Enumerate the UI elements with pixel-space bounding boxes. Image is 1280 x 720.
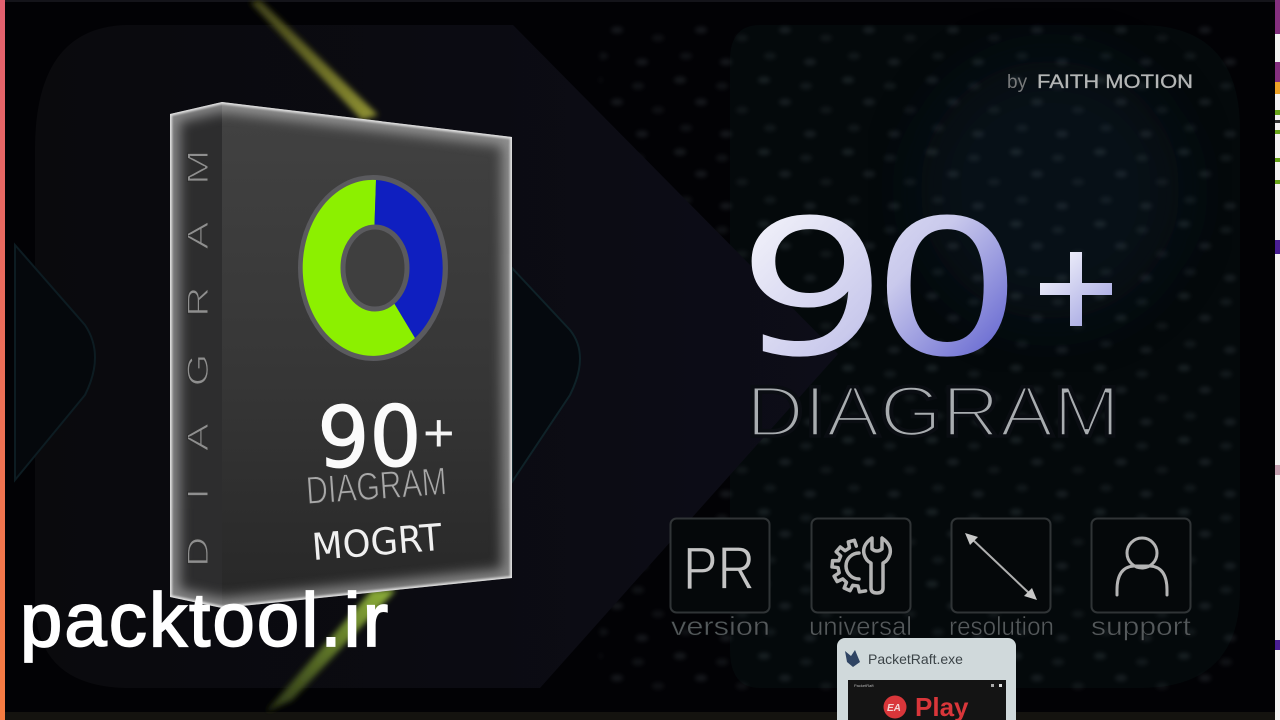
left accent edge (0, 0, 5, 720)
main headline: 90 (737, 180, 1023, 399)
right edge sliver (1275, 0, 1280, 720)
feature: PR version: PR (683, 535, 755, 602)
popup preview panel: PacketRaft (854, 683, 874, 688)
main headline: 90: 0 (871, 180, 1023, 399)
feature: support (1091, 518, 1192, 641)
feature: resolution: resolution (949, 611, 1054, 641)
main headline: 90: 9 (737, 180, 888, 399)
popup preview panel (848, 680, 1006, 720)
icon: wolf logo (845, 650, 860, 667)
byline: by (1007, 72, 1028, 93)
watermark: packtool.ir: packtool.ir (20, 578, 388, 663)
yellow light streak: top (250, 0, 378, 120)
main headline plus sign (1040, 252, 1112, 326)
spine label: DIAGRAM (181, 150, 215, 567)
box subtitle: DIAGRAM: DIAGRAM (305, 460, 448, 513)
box front face (222, 102, 512, 608)
box label: MOGRT: MOGRT (310, 516, 444, 569)
feature: universal (809, 518, 912, 641)
donut chart (298, 175, 448, 361)
feature: PR version: version (671, 611, 770, 641)
feature: PR version (670, 518, 770, 641)
popup title: PacketRaft.exe (868, 651, 963, 667)
main subtitle: DIAGRAM: DIAGRAM (746, 373, 1120, 452)
popup preview panel: EA (887, 703, 901, 714)
popup window: PacketRaft.exe (837, 638, 1016, 720)
byline: FAITH MOTION (1037, 72, 1193, 93)
yellow light streak: bottom (266, 590, 396, 712)
feature: universal: universal (809, 611, 912, 641)
box plus sign: + (423, 403, 455, 463)
product box (170, 102, 512, 608)
EA logo (884, 696, 906, 718)
box headline: 90+: 90 (317, 387, 422, 487)
box spine (170, 102, 222, 608)
feature: support: support (1091, 611, 1192, 641)
icon: diagonal double arrow (965, 533, 1037, 600)
box edge glow (170, 102, 512, 608)
feature: resolution (949, 518, 1054, 641)
icon: gear and wrench (832, 538, 890, 593)
icon: person (1117, 538, 1167, 595)
